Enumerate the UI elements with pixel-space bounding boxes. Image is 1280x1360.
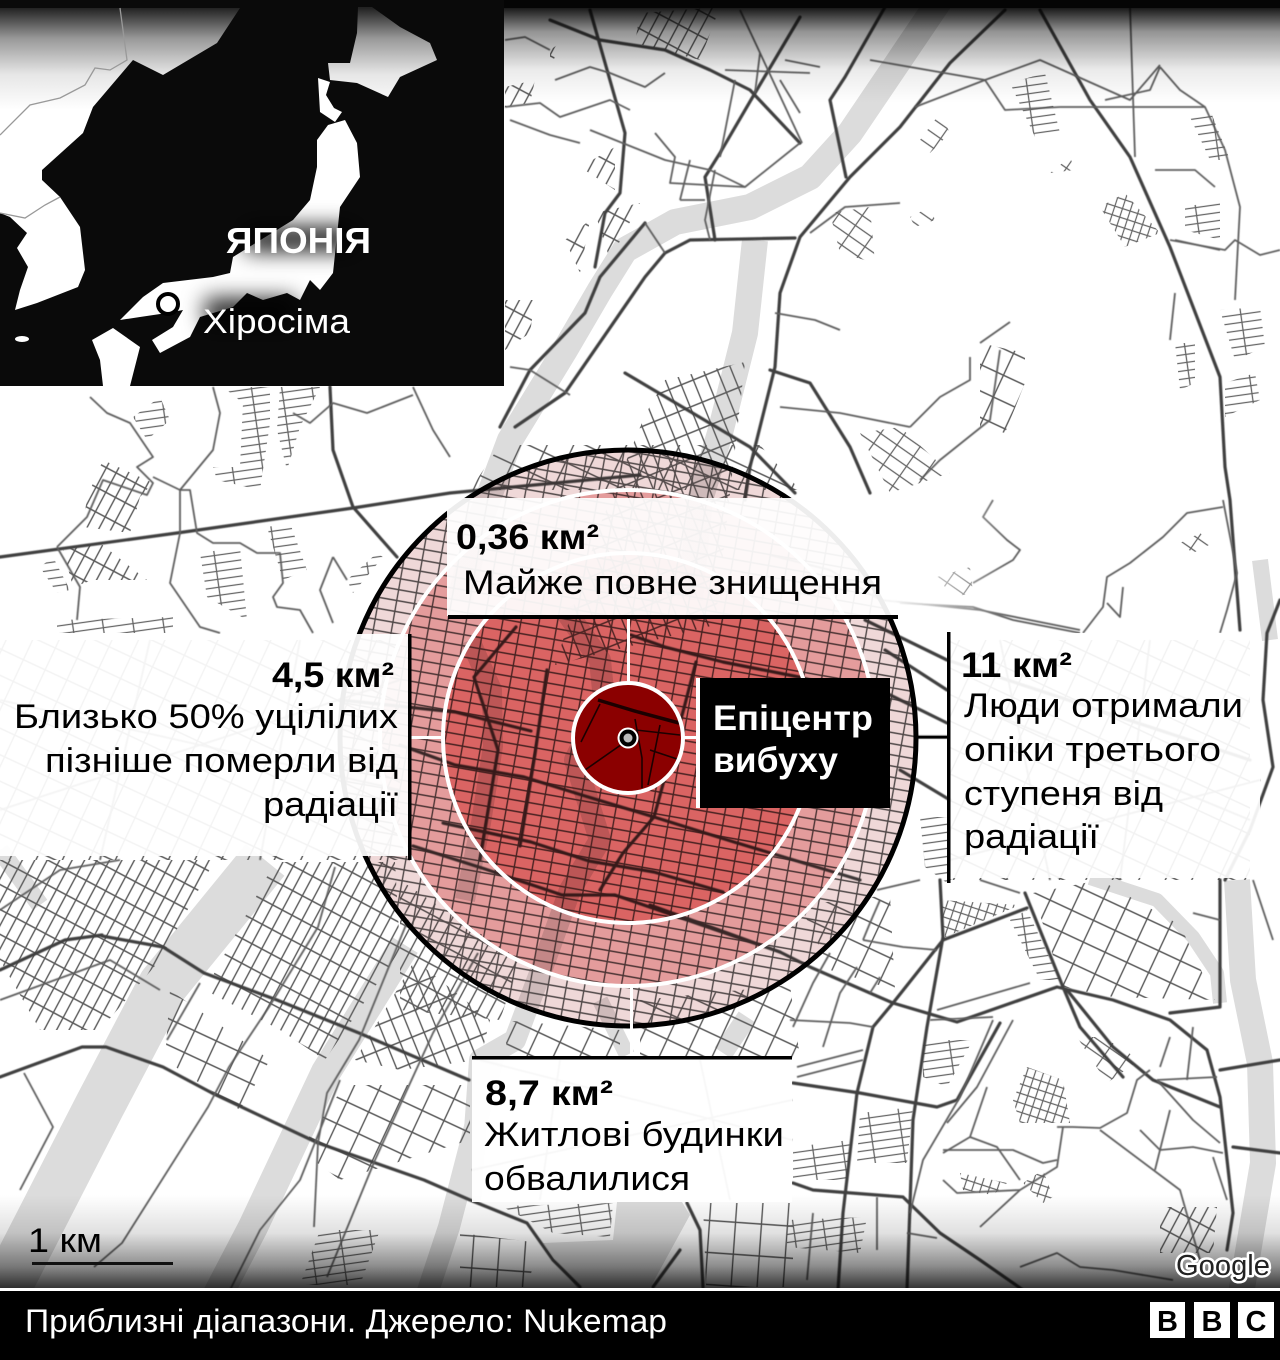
description 4.5: радіації xyxy=(263,786,399,824)
description 11: ступеня від xyxy=(964,775,1163,813)
value 0.36: 0,36 км² xyxy=(456,518,599,557)
shadow behind labels xyxy=(205,226,355,326)
panel: 4.5 km2 xyxy=(0,634,412,860)
panel: 0.36 km2 xyxy=(447,498,1007,619)
land: southern Hokkaido strip xyxy=(318,78,342,122)
panel: epicentre label: Епіцентр xyxy=(713,699,873,738)
land: Kyushu xyxy=(92,328,140,386)
BBC logo: C xyxy=(1246,1306,1267,1338)
ring: outer black boundary xyxy=(340,450,916,1026)
description 0.36: Майже повне знищення xyxy=(463,564,882,602)
scale bar: 1 км xyxy=(28,1222,102,1260)
description 4.5 xyxy=(14,698,399,824)
panel: epicentre label: вибуху xyxy=(713,741,839,780)
top and bottom vignette xyxy=(0,0,1280,8)
value 4.5: 4,5 км² xyxy=(272,656,394,695)
source note: Приблизні діапазони. Джерело: Nukemap xyxy=(25,1303,667,1339)
ring: 4.5 km boundary xyxy=(443,553,813,923)
BBC logo xyxy=(1150,1302,1274,1338)
description 11: опіки третього xyxy=(964,731,1221,769)
description 11: радіації xyxy=(964,818,1100,856)
BBC logo: B xyxy=(1202,1306,1222,1338)
description 8.7: обвалилися xyxy=(484,1160,690,1198)
BBC logo: B xyxy=(1157,1306,1178,1338)
blast zones tint xyxy=(340,450,916,1026)
inset locator map xyxy=(0,0,504,386)
panel: 11 km2 xyxy=(947,632,1260,883)
value 8.7: 8,7 км² xyxy=(485,1074,613,1113)
description 11: Люди отримали xyxy=(964,687,1243,725)
river patch below lower panel xyxy=(543,1202,690,1288)
description 8.7 xyxy=(484,1116,784,1198)
land: Honshu and Shikoku xyxy=(120,120,360,353)
panel: 8.7 km2 xyxy=(472,1056,792,1202)
scale bar xyxy=(28,1222,173,1265)
marker: Hiroshima xyxy=(158,294,178,314)
connector lines xyxy=(411,618,948,1056)
land: Hokkaido xyxy=(328,7,437,97)
ring: 8.7 km boundary xyxy=(380,490,876,986)
land: mainland and Korea xyxy=(0,8,240,310)
footer bar xyxy=(0,1288,1280,1360)
label: Japan: ЯПОНІЯ xyxy=(226,220,371,261)
description 4.5: Близько 50% уцілілих xyxy=(14,698,398,736)
value 11: 11 км² xyxy=(961,646,1072,685)
description 11 xyxy=(964,687,1243,856)
description 8.7: Житлові будинки xyxy=(484,1116,784,1154)
ring: epicentre boundary xyxy=(573,683,683,793)
google attribution: Google xyxy=(1176,1250,1270,1282)
epicentre zone xyxy=(574,684,682,792)
label: Hiroshima: Хіросіма xyxy=(203,303,350,341)
description 4.5: пізніше померли від xyxy=(45,742,398,780)
ground zero marker xyxy=(618,728,638,748)
panel: epicentre label xyxy=(696,678,890,808)
small island xyxy=(15,336,29,342)
